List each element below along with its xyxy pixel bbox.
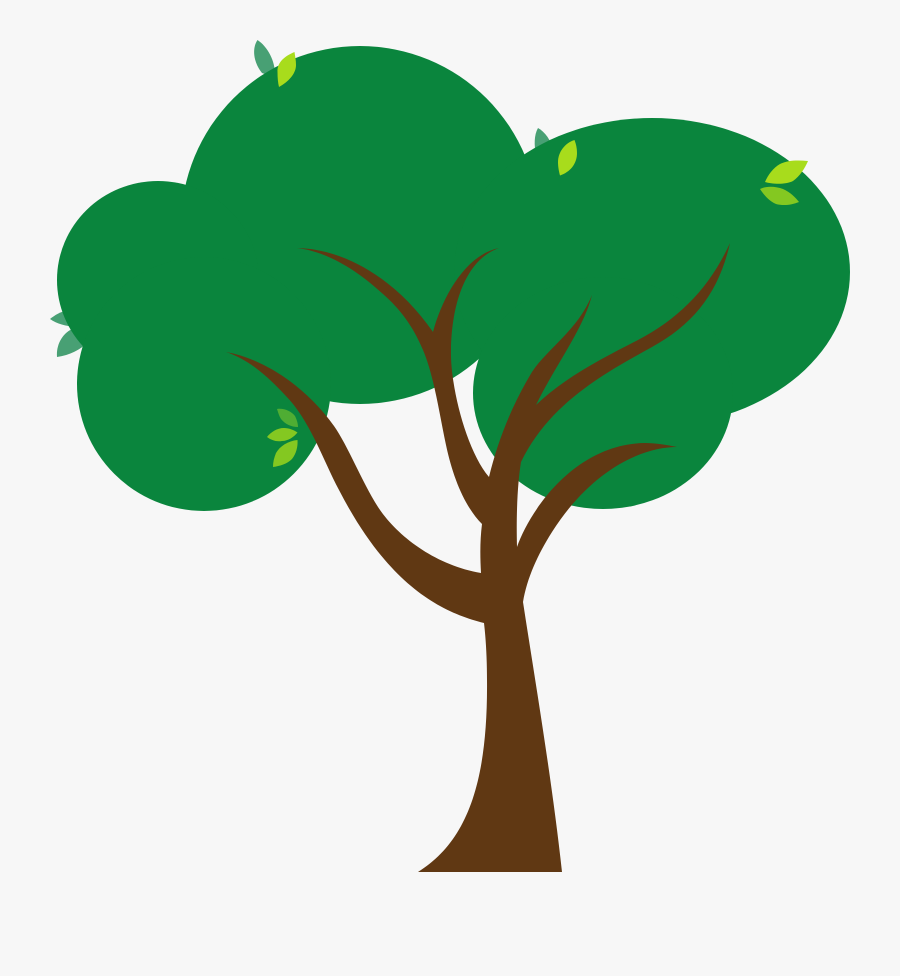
bright leaves [267,52,808,467]
tree canopy [57,46,850,511]
trunk and branches [226,243,730,872]
faded leaves behind canopy [50,40,553,357]
